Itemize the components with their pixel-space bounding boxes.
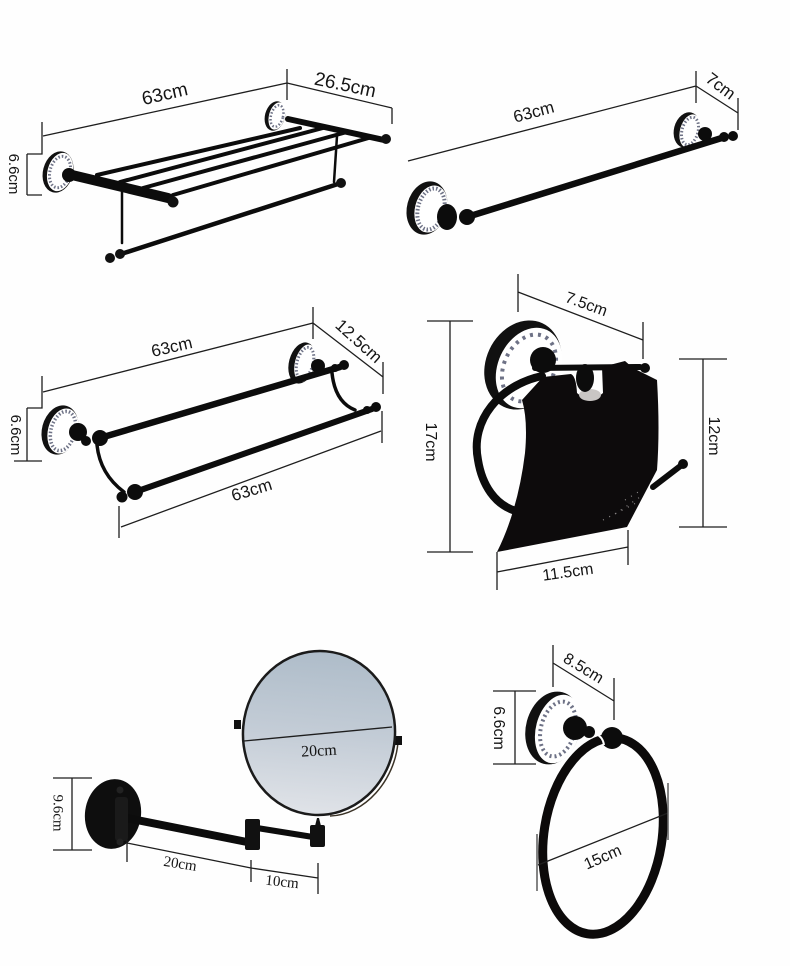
label: 17cm: 17cm	[422, 422, 439, 462]
dimension lines: folding mirror	[53, 727, 392, 894]
dimension lines: towel rack	[27, 69, 392, 195]
panel: towel ring	[490, 645, 677, 943]
dimension lines: single towel bar	[408, 71, 738, 161]
label: 26.5cm: 26.5cm	[312, 69, 378, 102]
label: 6.6cm: 6.6cm	[490, 706, 507, 750]
single towel bar drawing	[401, 109, 738, 239]
panel: folding mirror	[50, 645, 402, 894]
label: 7.5cm: 7.5cm	[563, 289, 609, 320]
label: 10cm arm: 10cm	[265, 873, 300, 892]
label: 20cm arm: 20cm	[162, 854, 198, 875]
panel: towel rack	[5, 69, 392, 263]
dimension lines: double towel bar	[14, 307, 383, 538]
label: 63cm: 63cm	[511, 97, 556, 127]
label: 6.6cm: 6.6cm	[7, 415, 24, 455]
label: 63cm bottom: 63cm	[229, 475, 274, 505]
label: 20cm diameter: 20cm	[301, 742, 338, 761]
label: 6.6cm: 6.6cm	[5, 154, 22, 194]
label: 7cm: 7cm	[702, 69, 739, 103]
label: 9.6cm: 9.6cm	[50, 794, 66, 832]
label: 11.5cm: 11.5cm	[541, 561, 595, 585]
label: 12.5cm: 12.5cm	[332, 316, 386, 367]
dimension lines: toilet paper holder	[427, 274, 727, 590]
double towel bar drawing	[36, 339, 381, 502]
dimension lines: towel ring	[493, 645, 668, 865]
towel rack drawing	[38, 99, 391, 263]
label: 8.5cm: 8.5cm	[560, 650, 606, 687]
panel: single towel bar	[401, 69, 739, 239]
label: 63cm top: 63cm	[149, 333, 194, 361]
toilet paper holder drawing	[470, 308, 688, 552]
panel: double towel bar	[7, 307, 386, 538]
panel: toilet paper holder	[422, 274, 727, 590]
ring extension ticks	[537, 783, 668, 891]
label: 63cm: 63cm	[140, 79, 190, 110]
label: 12cm: 12cm	[705, 416, 722, 456]
towel ring drawing	[517, 685, 677, 943]
folding mirror drawing	[80, 645, 402, 853]
label: 15cm: 15cm	[582, 842, 624, 873]
